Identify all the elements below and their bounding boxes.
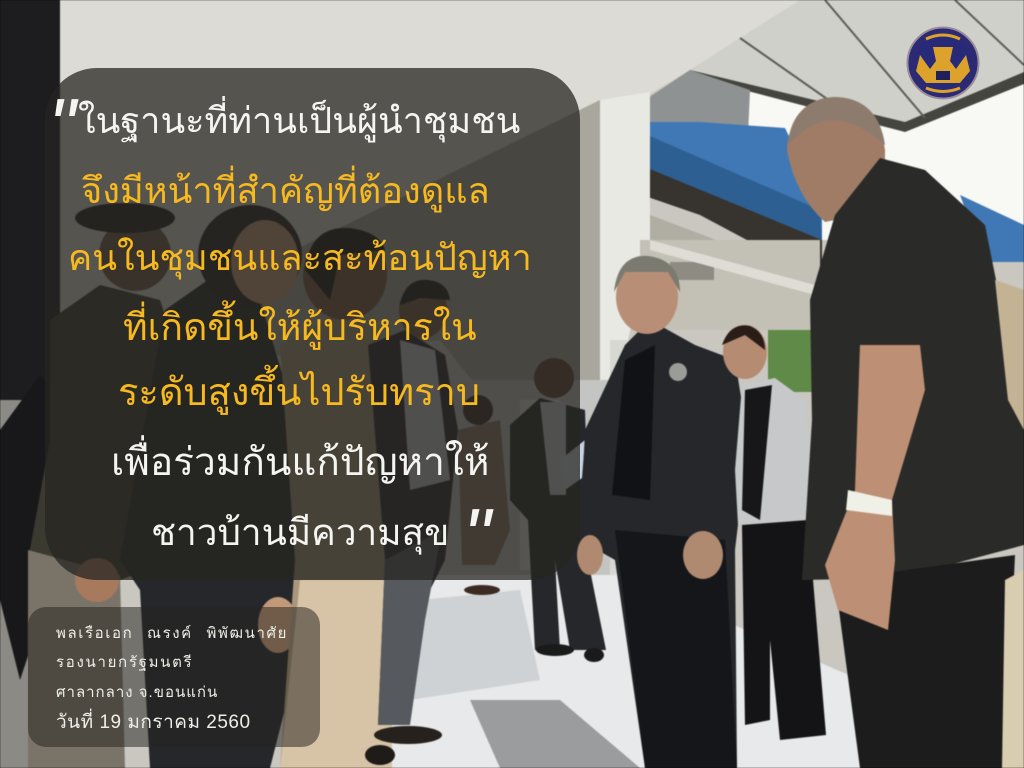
person: central official in black jacket [536, 256, 748, 768]
column [600, 92, 650, 640]
closing quote mark: " [463, 492, 491, 580]
credit name: พลเรือเอก ณรงค์ พิพัฒนาศัย [56, 625, 288, 642]
person: left background [0, 375, 60, 680]
person: woman in dark suit [120, 205, 315, 768]
opening quote mark: " [48, 82, 76, 170]
back wall [440, 380, 610, 580]
overhang [690, 0, 1024, 130]
person: man with white shirt [365, 280, 458, 765]
emblem: government seal [906, 26, 980, 100]
quote line 3: คนในชุมชนและสะท้อนปัญหา [68, 237, 532, 278]
blue roof [636, 122, 822, 240]
quote line 5: ระดับสูงขึ้นไปรับทราบ [118, 372, 480, 414]
panel: credit [28, 607, 320, 747]
person: man with folder [510, 358, 606, 650]
quote line 2: จึงมีหน้าที่สำคัญที่ต้องดูแล [81, 170, 490, 211]
credit position: รองนายกรัฐมนตรี [56, 654, 193, 671]
credit place: ศาลากลาง จ.ขอนแก่น [56, 684, 218, 701]
person: officer in khaki [280, 228, 430, 768]
person: foreground official seen from behind [787, 97, 1024, 768]
person: woman background [458, 395, 510, 595]
person: woman in white jacket [722, 325, 826, 740]
quote line 4: ที่เกิดขึ้นให้ผู้บริหารใน [123, 306, 477, 348]
quote line 6: เพื่อร่วมกันแก้ปัญหาให้ [111, 441, 489, 484]
panel: quotation [45, 68, 580, 580]
quote line 7: ชาวบ้านมีความสุข [151, 512, 449, 553]
quote line 1: ในฐานะที่ท่านเป็นผู้นำชุมชน [78, 100, 520, 141]
floor [380, 575, 865, 768]
person: police officer [28, 203, 180, 768]
credit date: วันที่ 19 มกราคม 2560 [56, 712, 251, 733]
